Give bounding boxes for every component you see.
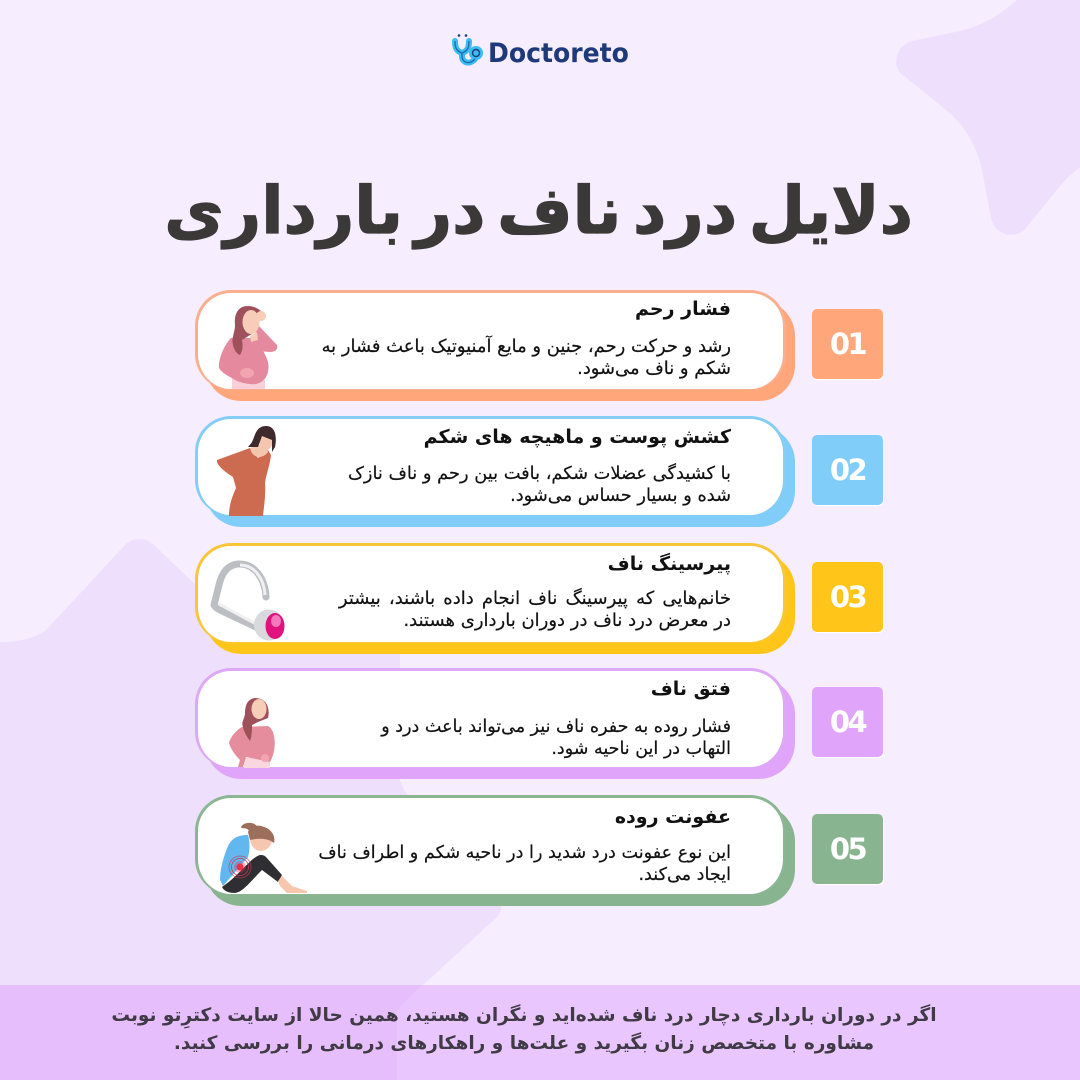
title: دلایل درد ناف در بارداری bbox=[164, 174, 913, 249]
text 04: فشار روده به حفره ناف نیز می‌تواند باعث درد و bbox=[381, 717, 731, 737]
number 04: 04 bbox=[830, 705, 865, 739]
heading 03: پیرسینگ ناف bbox=[608, 553, 731, 575]
footer text bbox=[111, 1004, 937, 1054]
logo wordmark: Doctoreto bbox=[488, 38, 629, 69]
heading 05: عفونت روده bbox=[615, 806, 731, 828]
icon: pregnant woman holding head bbox=[218, 306, 278, 389]
text 05 bbox=[318, 843, 731, 885]
icon: seated woman with abdominal pain bbox=[220, 822, 307, 893]
text 03: خانم‌هایی که پیرسینگ ناف انجام داده باشند، بیشتر bbox=[339, 588, 731, 609]
text 02 bbox=[348, 462, 731, 506]
number 02 bbox=[812, 435, 883, 505]
text 05: این نوع عفونت درد شدید را در ناحیه شکم و اطراف ناف bbox=[318, 843, 731, 863]
item 02: skin and muscle stretching bbox=[195, 416, 884, 527]
text 02: شده و بسیار حساس می‌شود. bbox=[510, 485, 731, 506]
footer text: مشاوره با متخصص زنان بگیرید و علت‌ها و راهکارهای درمانی را بررسی کنید. bbox=[174, 1033, 874, 1054]
text 01 bbox=[322, 335, 731, 379]
logo: Doctoreto bbox=[452, 34, 629, 69]
icon: piercing bbox=[210, 560, 284, 640]
text 01: رشد و حرکت رحم، جنین و مایع آمنیوتیک باعث فشار به bbox=[322, 336, 731, 357]
heading 01: فشار رحم bbox=[635, 298, 731, 320]
number 02: 02 bbox=[830, 453, 865, 487]
heading 02: کشش پوست و ماهیچه های شکم bbox=[424, 426, 731, 448]
item 01: uterine pressure bbox=[195, 290, 884, 401]
number 05: 05 bbox=[830, 832, 865, 866]
text 03: در معرض درد ناف در دوران بارداری هستند. bbox=[403, 610, 731, 631]
text 04 bbox=[380, 717, 731, 759]
icon: stethoscope bbox=[452, 34, 483, 66]
footer text: اگر در دوران بارداری دچار درد ناف شده‌اید و نگران هستید، همین حالا از سایت دکترِتو نوبت bbox=[111, 1005, 937, 1026]
text 01: شکم و ناف می‌شود. bbox=[577, 358, 731, 379]
heading 04: فتق ناف bbox=[651, 678, 731, 700]
number 04 bbox=[812, 687, 883, 757]
footer band bbox=[0, 985, 1080, 1080]
number 03: 03 bbox=[830, 580, 865, 614]
number 01 bbox=[812, 309, 883, 379]
text 02: با کشیدگی عضلات شکم، بافت بین رحم و ناف نازک bbox=[348, 463, 731, 484]
footer blob overlap bbox=[0, 985, 430, 1080]
text 04: التهاب در این ناحیه شود. bbox=[551, 739, 731, 759]
text 05: ایجاد می‌کند. bbox=[638, 865, 731, 885]
icon: pregnant woman holding back bbox=[216, 426, 276, 516]
number 01: 01 bbox=[830, 327, 865, 361]
number 05 bbox=[812, 814, 883, 884]
item 05: intestinal infection bbox=[195, 795, 884, 906]
icon: woman holding belly bbox=[229, 698, 275, 768]
text 03 bbox=[338, 588, 731, 631]
number 03 bbox=[812, 562, 883, 632]
item 03: navel piercing bbox=[195, 543, 884, 654]
item 04: umbilical hernia bbox=[195, 668, 884, 779]
